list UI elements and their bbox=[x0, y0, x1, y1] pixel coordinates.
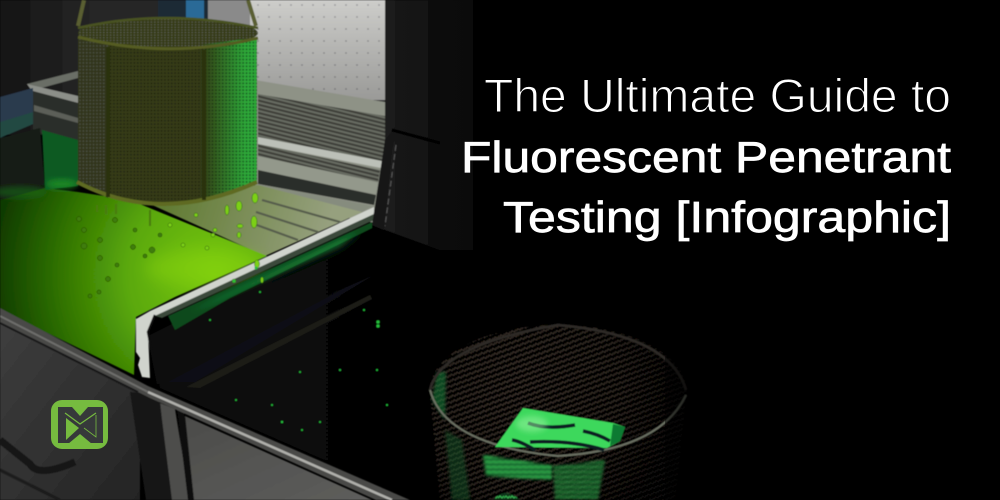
green penetrant bath bbox=[0, 130, 267, 375]
rear rack with rails bbox=[0, 71, 385, 225]
rear wall and pegboard bbox=[0, 0, 385, 135]
dark area behind the curtain bbox=[385, 0, 1000, 260]
right side dark fade bbox=[390, 0, 1000, 320]
glowing part in basket bbox=[495, 408, 625, 450]
photograph bbox=[0, 0, 688, 500]
rack stripes under the basket bbox=[254, 200, 340, 240]
logo: green rounded badge with MX monogram bbox=[51, 400, 108, 449]
black hanging curtain bbox=[372, 0, 500, 250]
darkening over right part of tank bbox=[665, 320, 1000, 500]
title: The Ultimate Guide to bbox=[484, 69, 951, 122]
dark rinse tank bbox=[150, 222, 1000, 500]
fluorescent specks in tank bbox=[209, 266, 388, 431]
dripping droplets bbox=[76, 193, 264, 298]
title: Testing [Infographic] bbox=[503, 193, 951, 242]
hanging wet basket bbox=[77, 0, 258, 205]
metal cabinet and rail bbox=[0, 308, 410, 500]
title bbox=[461, 69, 951, 242]
title: Fluorescent Penetrant bbox=[461, 133, 951, 182]
white tank rim bbox=[136, 207, 374, 384]
basket in rinse tank bbox=[430, 325, 686, 500]
lit rack area under the basket bbox=[130, 185, 362, 256]
